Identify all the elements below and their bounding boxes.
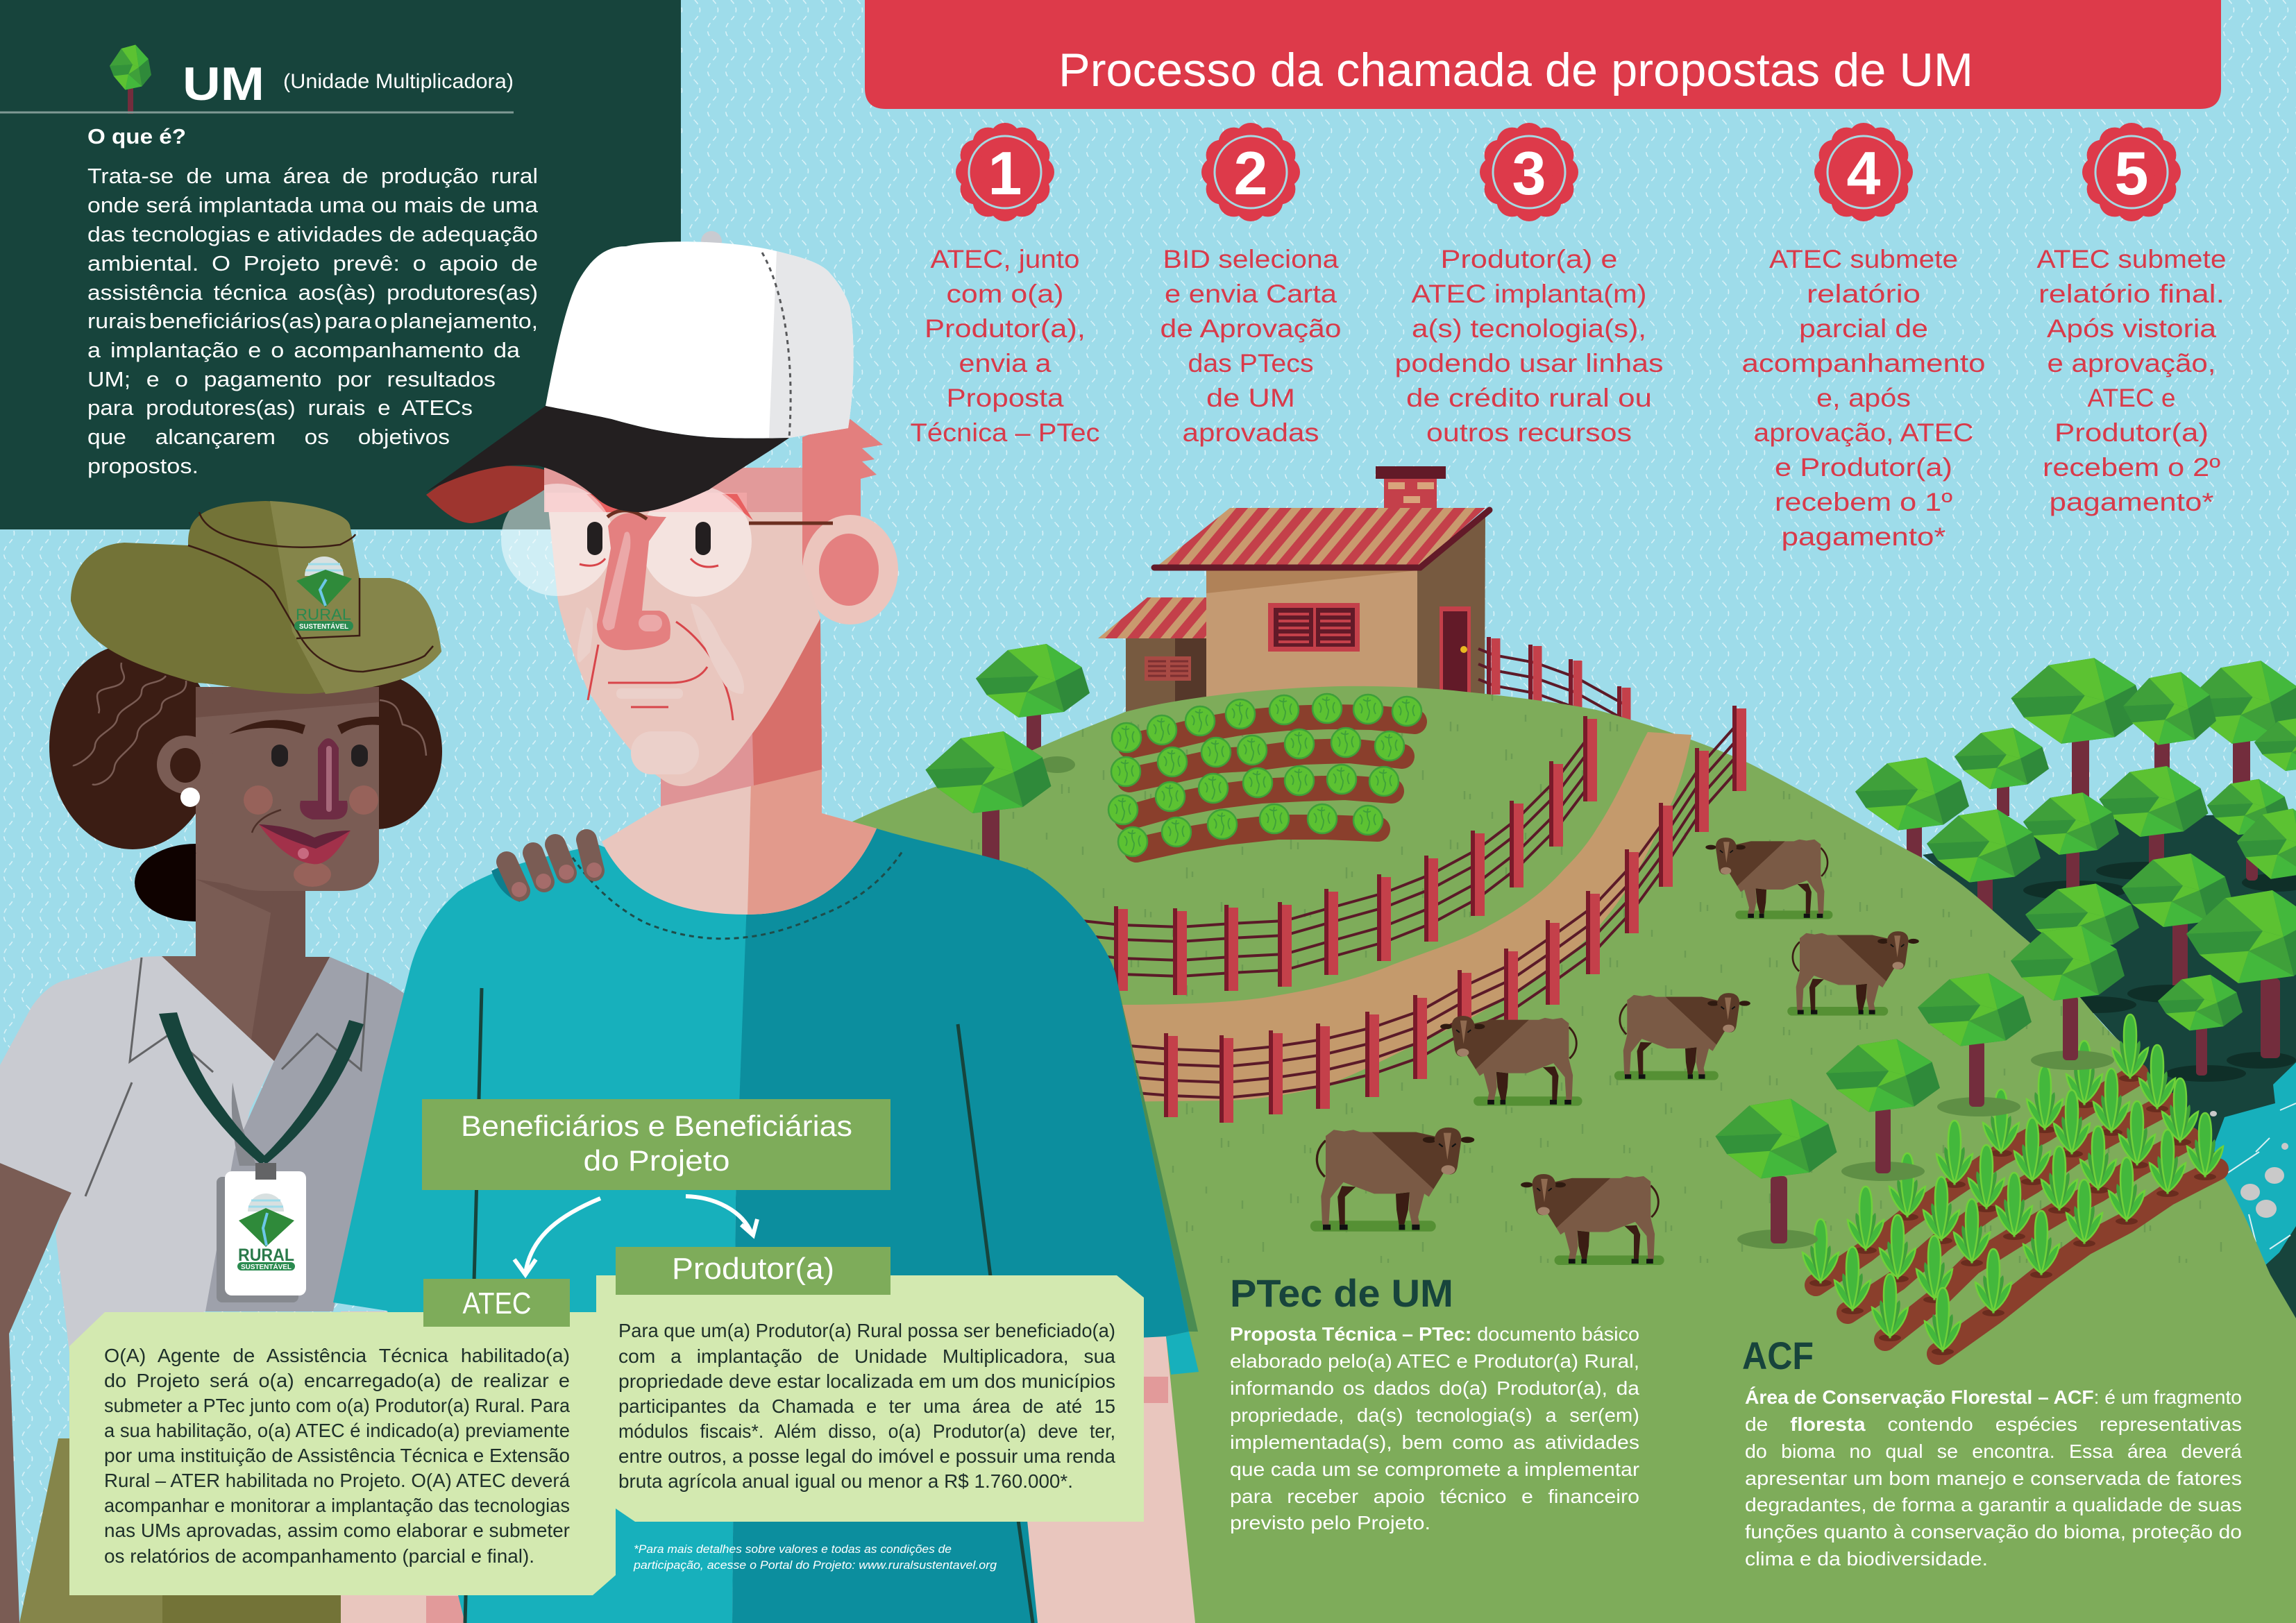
- panel: ATEC: nas UMs aprovadas, assim como elaborar e submeter: [104, 1520, 570, 1541]
- panel: ATEC: ATEC: [462, 1286, 532, 1320]
- step 1: Técnica – PTec: [911, 418, 1099, 447]
- panel: Produtor(a): entre outros, a posse legal do imóvel e possuir uma renda: [618, 1445, 1115, 1467]
- woman face: [157, 687, 379, 891]
- title banner: [865, 0, 2221, 109]
- lanyard: [159, 1012, 364, 1180]
- vegetable beds with cabbages: [1108, 694, 1421, 856]
- step 1: ATEC, junto: [930, 245, 1080, 273]
- text: O que é: a implantação e o acompanhamento da: [87, 338, 521, 362]
- man shirt and arms: [333, 829, 1199, 1623]
- panel: ATEC: [69, 1279, 616, 1595]
- forest background: [1923, 812, 2296, 1318]
- panel: Produtor(a): Produtor(a): [672, 1252, 834, 1286]
- step 2: e envia Carta: [1165, 280, 1337, 308]
- step 5: recebem o 2º: [2043, 453, 2221, 482]
- text: PTec de UM: Proposta Técnica – PTec: documento básico: [1230, 1323, 1639, 1345]
- text: ACF: de floresta contendo espécies representativas: [1745, 1413, 2242, 1435]
- ID badge: [217, 1163, 306, 1302]
- ID badge: RURAL: [238, 1246, 294, 1265]
- panel: ATEC: submeter a PTec junto com o(a) Produtor(a) Rural. Para: [104, 1395, 570, 1416]
- step 3: 3: [1512, 139, 1546, 207]
- arrow to Produtor: [686, 1196, 757, 1235]
- step 3: outros recursos: [1426, 418, 1632, 447]
- step 4: parcial de: [1799, 314, 1928, 343]
- step 1: envia a: [959, 349, 1052, 377]
- panel: ATEC: acompanhar e monitorar a implantação das tecnologias: [104, 1495, 570, 1516]
- step 3: podendo usar linhas: [1395, 349, 1663, 377]
- panel: ATEC: por uma instituição de Assistência Técnica e Extensão: [104, 1445, 570, 1466]
- hat logo: SUSTENTÁVEL: [299, 622, 348, 631]
- step 1: Produtor(a),: [925, 314, 1086, 343]
- step 2: de Aprovação: [1160, 314, 1341, 343]
- panel: Produtor(a): propriedade deve estar localizada em um dos municípios: [618, 1370, 1115, 1392]
- hat logo: RURAL: [296, 606, 351, 623]
- heading: Beneficiários e Beneficiárias: Beneficiários e Beneficiárias: [461, 1110, 852, 1142]
- text: PTec de UM: informando os dados do(a) Produtor(a), da: [1230, 1377, 1639, 1399]
- step 1: 1: [988, 139, 1022, 207]
- panel: Produtor(a): com a implantação de Unidade Multiplicadora, sua: [618, 1345, 1115, 1367]
- step 4: [1742, 123, 1985, 551]
- step 1: [911, 123, 1099, 447]
- text: ACF: ACF: [1742, 1334, 1814, 1377]
- panel: ATEC: a sua habilitação, o(a) ATEC é indicado(a) previamente: [104, 1420, 570, 1441]
- step 4: pagamento*: [1781, 522, 1946, 551]
- step 5: Produtor(a): [2054, 418, 2209, 447]
- step 4: ATEC submete: [1769, 245, 1958, 273]
- text: O que é: onde será implantada uma ou mais de uma: [87, 193, 539, 217]
- man ear: [802, 515, 898, 624]
- panel: Produtor(a): Para que um(a) Produtor(a) Rural possa ser beneficiado(a): [618, 1320, 1115, 1341]
- step 3: de crédito rural ou: [1406, 384, 1652, 412]
- step 5: ATEC e: [2088, 384, 2175, 412]
- text: PTec de UM: PTec de UM: [1230, 1271, 1453, 1315]
- panel: ATEC: do Projeto será o(a) encarregado(a) de realizar e: [104, 1370, 570, 1391]
- ID badge: SUSTENTÁVEL: [241, 1262, 292, 1271]
- text: O que é: O que é?: [87, 124, 186, 148]
- man face: [501, 468, 833, 786]
- back fence: [1478, 637, 1626, 736]
- panel: Produtor(a): módulos fiscais*. Além disso, o(a) Produtor(a) deve ter,: [618, 1420, 1115, 1442]
- step 2: 2: [1234, 139, 1267, 207]
- woman shirt: [0, 956, 405, 1353]
- step 2: das PTecs: [1188, 349, 1313, 377]
- text: PTec de UM: implementada(s), bem como as atividades: [1230, 1431, 1639, 1453]
- text: ACF: Área de Conservação Florestal – ACF: é um fragmento: [1745, 1386, 2242, 1408]
- tree: behind hill: [976, 644, 1090, 753]
- text: PTec de UM: para receber apoio técnico e financeiro: [1230, 1486, 1639, 1507]
- UM header block: [0, 44, 514, 114]
- step 3: [1395, 123, 1663, 447]
- step 4: e Produtor(a): [1775, 453, 1952, 482]
- text: O que é: [87, 124, 539, 478]
- woman hair: [49, 644, 442, 921]
- cows: [1310, 838, 1919, 1265]
- step 5: Após vistoria: [2047, 314, 2216, 343]
- footnote: *Para mais detalhes sobre valores e todas as condições de: [634, 1543, 952, 1556]
- text: O que é: para produtores(as) rurais e ATECs: [87, 396, 473, 420]
- hat logo: [294, 556, 353, 631]
- step 5: ATEC submete: [2036, 245, 2227, 273]
- step 4: aprovação, ATEC: [1753, 418, 1974, 447]
- tree: near hill crest: [926, 731, 1051, 860]
- step 2: de UM: [1206, 384, 1295, 412]
- hill: [833, 680, 2296, 1623]
- heading: Beneficiários e Beneficiárias: do Projeto: [583, 1144, 730, 1177]
- text: PTec de UM: previsto pelo Projeto.: [1230, 1512, 1430, 1533]
- panel: Produtor(a): [596, 1247, 1144, 1522]
- step 5: [2036, 123, 2227, 516]
- step 3: a(s) tecnologia(s),: [1412, 314, 1646, 343]
- woman character: [0, 501, 442, 1623]
- text: ACF: apresentar um bom manejo e conservada de fatores: [1745, 1468, 2242, 1489]
- text: ACF: clima e da biodiversidade.: [1745, 1548, 1988, 1570]
- step 2: [1160, 123, 1341, 447]
- text: ACF: degradantes, de forma a garantir a qualidade de suas: [1745, 1494, 2242, 1515]
- panel: ATEC: O(A) Agente de Assistência Técnica habilitado(a): [104, 1345, 570, 1366]
- text: PTec de UM: que cada um se compromete a implementar: [1230, 1459, 1639, 1480]
- lower fence: [1111, 706, 1741, 1123]
- woman neck: [162, 853, 330, 1061]
- panel: O que é: [0, 0, 681, 529]
- UM header block: (Unidade Multiplicadora): [283, 70, 514, 93]
- text: PTec de UM: propriedade, da(s) tecnologia(s) a ser(em): [1230, 1404, 1639, 1426]
- text: O que é: que alcançarem os objetivos: [87, 425, 450, 449]
- man hand on shoulder: [491, 840, 602, 902]
- panel: Produtor(a): bruta agrícola anual igual ou menor a R$ 1.760.000*.: [618, 1470, 1073, 1492]
- river with rocks: [2210, 1062, 2296, 1266]
- man cap: [426, 231, 854, 523]
- step 3: ATEC implanta(m): [1412, 280, 1646, 308]
- plantation rows: [1803, 1014, 2223, 1355]
- panel: ATEC: Rural – ATER habilitada no Projeto. O(A) ATEC deverá: [104, 1470, 570, 1491]
- step 1: Proposta: [947, 384, 1064, 412]
- woman arm and trousers: [0, 1163, 341, 1623]
- text: O que é: UM; e o pagamento por resultados: [87, 367, 496, 391]
- step 4: acompanhamento: [1742, 349, 1985, 377]
- panel: ATEC: os relatórios de acompanhamento (parcial e final).: [104, 1545, 534, 1567]
- trees on slope: [1716, 884, 2139, 1249]
- woman hat: [71, 501, 441, 694]
- step 4: relatório: [1807, 280, 1921, 308]
- step 2: aprovadas: [1183, 418, 1319, 447]
- text: ACF: do bioma no qual se encontra. Essa área deverá: [1745, 1441, 2242, 1462]
- man character: [333, 231, 1199, 1623]
- step 4: e, após: [1816, 384, 1911, 412]
- text: O que é: das tecnologias e atividades de adequação: [87, 222, 538, 246]
- arrow to ATEC: [514, 1198, 600, 1275]
- step 2: BID seleciona: [1163, 245, 1339, 273]
- footnote: [633, 1543, 997, 1572]
- back forest trees: [1855, 658, 2296, 1076]
- step 5: 5: [2115, 139, 2148, 207]
- text: ACF: funções quanto à conservação do bioma, proteção do: [1745, 1521, 2242, 1543]
- step 5: pagamento*: [2049, 488, 2214, 516]
- step 4: recebem o 1º: [1775, 488, 1953, 516]
- step 5: e aprovação,: [2048, 349, 2215, 377]
- house: [1098, 466, 1489, 715]
- panel: Produtor(a): participantes da Chamada e ter uma área de até 15: [618, 1395, 1115, 1417]
- title banner: Processo da chamada de propostas de UM: [1058, 44, 1973, 96]
- step 3: Produtor(a) e: [1441, 245, 1617, 273]
- step 1: com o(a): [947, 280, 1063, 308]
- text: O que é: Trata-se de uma área de produção rural: [87, 164, 538, 188]
- text: O que é: propostos.: [87, 454, 199, 478]
- man neck: [573, 618, 904, 939]
- icon: tree: [110, 44, 151, 114]
- footnote: participação, acesse o Portal do Projeto: www.ruralsustentavel.org: [633, 1558, 997, 1572]
- upper fence: [1069, 716, 1592, 995]
- UM header block: UM: [183, 58, 264, 110]
- text: O que é: ambiental. O Projeto prevê: o apoio de: [87, 251, 538, 275]
- text: PTec de UM: [1230, 1271, 1639, 1533]
- text: PTec de UM: elaborado pelo(a) ATEC e Produtor(a) Rural,: [1230, 1350, 1639, 1372]
- step 4: 4: [1847, 139, 1881, 207]
- step 5: relatório final.: [2038, 280, 2225, 308]
- man hair: [802, 419, 883, 566]
- dirt road: [1111, 732, 1691, 1102]
- text: ACF: [1742, 1334, 2242, 1570]
- text: O que é: rurais beneficiários(as) para o planejamento,: [87, 309, 538, 333]
- heading: Beneficiários e Beneficiárias: [422, 1099, 890, 1190]
- text: O que é: assistência técnica aos(às) produtores(as): [87, 280, 538, 305]
